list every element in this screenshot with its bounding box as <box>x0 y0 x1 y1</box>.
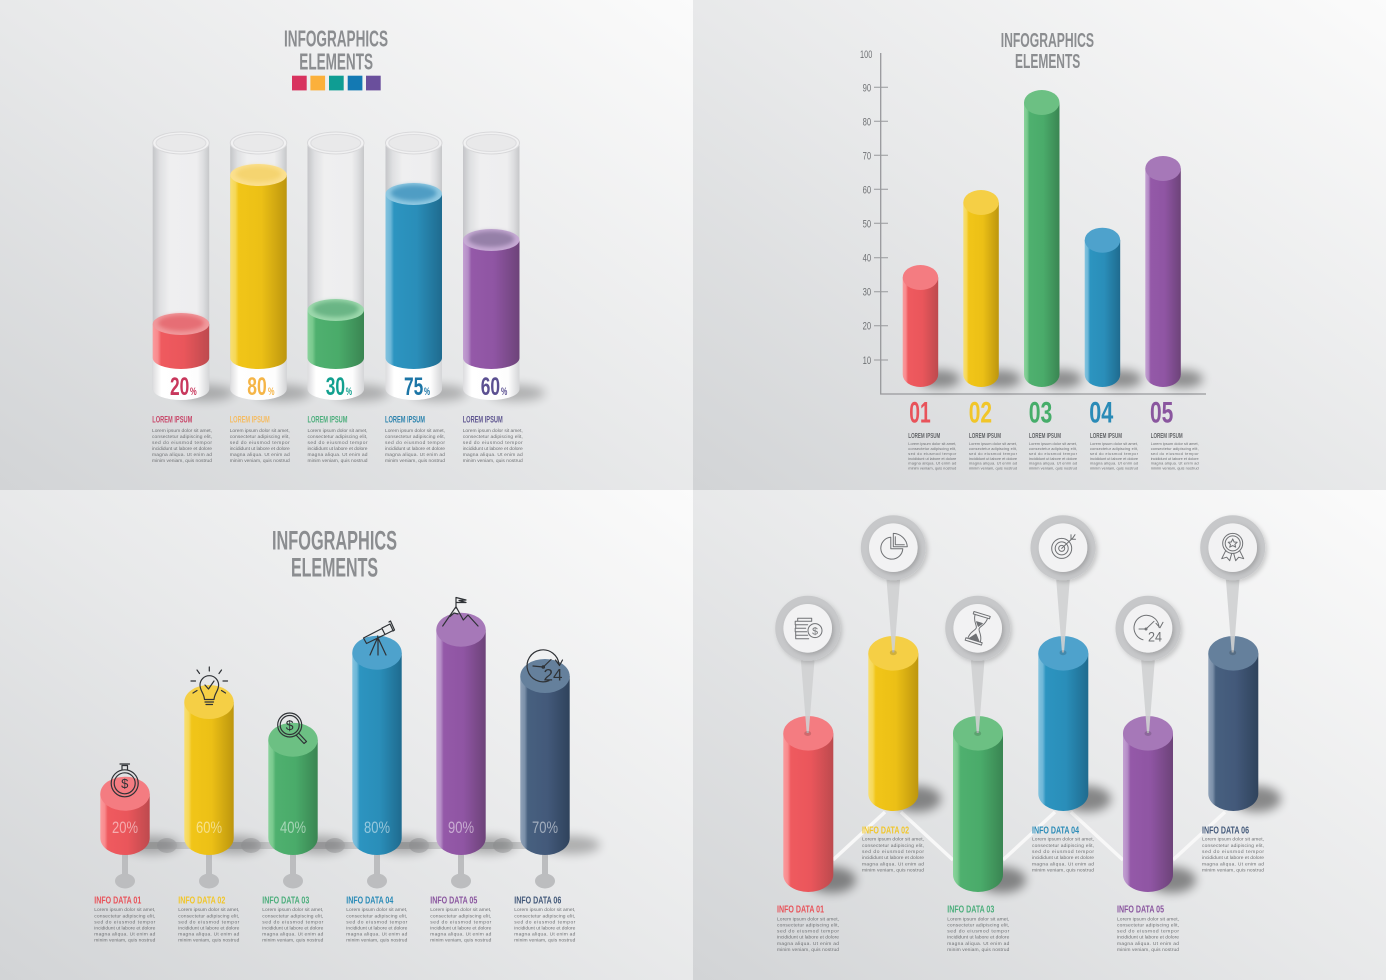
text block 03: magna aliqua. Ut enim ad <box>947 941 1010 947</box>
tube 3: 30 percent <box>308 132 389 401</box>
text block 02: consectetur adipiscing elit, <box>862 843 924 849</box>
text block 02: Lorem ipsum dolor sit amet, <box>862 837 924 843</box>
text block 2: magna aliqua. Ut enim ad <box>230 452 290 458</box>
value: 60%: 60 <box>481 373 500 401</box>
text block 05: Lorem ipsum dolor sit amet, <box>1151 441 1199 446</box>
text block 1: Lorem ipsum dolor sit amet, <box>152 428 212 434</box>
text block 03: incididunt ut labore et dolore <box>262 926 324 932</box>
text block 05: magna aliqua. Ut enim ad <box>1117 941 1179 947</box>
text block 3 <box>308 415 368 464</box>
text block 04: magna aliqua. Ut enim ad <box>1032 861 1094 867</box>
text block 02 <box>862 824 924 873</box>
text block 3: sed do eiusmod tempor <box>308 440 368 446</box>
text block 05: minim veniam, quis nostrud <box>1117 947 1179 953</box>
text block 01: Lorem ipsum dolor sit amet, <box>777 916 839 922</box>
color swatches <box>292 76 381 90</box>
cylinder 01: 20%: 20% <box>112 818 138 837</box>
text block 03: minim veniam, quis nostrud <box>1029 465 1077 470</box>
number labels: 05 <box>1150 397 1173 430</box>
text block 06: consectetur adipiscing elit, <box>514 913 575 919</box>
title: ELEMENTS <box>291 552 378 582</box>
text block 06 <box>514 895 576 944</box>
text block 04: magna aliqua. Ut enim ad <box>346 932 408 938</box>
text block 1: magna aliqua. Ut enim ad <box>152 452 212 458</box>
text block 4: Lorem ipsum dolor sit amet, <box>385 428 445 434</box>
tube 5: 60 percent <box>463 132 545 401</box>
cylinder 02 <box>963 190 1021 388</box>
value: 60%: % <box>501 386 507 398</box>
title <box>272 526 397 582</box>
axis with tick labels: 50 <box>863 218 871 230</box>
text block 02: minim veniam, quis nostrud <box>969 465 1017 470</box>
cylinder 03: 40% <box>268 723 348 855</box>
text block 04: magna aliqua. Ut enim ad <box>1090 461 1138 466</box>
text block 03: magna aliqua. Ut enim ad <box>1029 461 1077 466</box>
text block 5: minim veniam, quis nostrud <box>463 458 523 464</box>
axis with tick labels: 10 <box>863 355 871 367</box>
icon: magnifier with dollar <box>278 713 306 744</box>
text block 02: incididunt ut labore et dolore <box>969 456 1017 461</box>
text block 02 <box>178 895 240 944</box>
text block 04: consectetur adipiscing elit, <box>346 913 407 919</box>
text block 05 <box>1117 903 1179 953</box>
icon: clock 24: 24 <box>1148 630 1162 645</box>
cylinder 03 <box>1024 90 1082 388</box>
text block 2: sed do eiusmod tempor <box>230 440 290 446</box>
cylinder 04: 80%: 80% <box>364 818 390 837</box>
text block 03 <box>947 903 1010 953</box>
axis with tick labels: 30 <box>863 287 871 299</box>
text block 06: Lorem ipsum dolor sit amet, <box>1202 837 1264 843</box>
text block 02: Lorem ipsum dolor sit amet, <box>178 907 239 913</box>
text block 04: consectetur adipiscing elit, <box>1090 446 1138 451</box>
text block 03: magna aliqua. Ut enim ad <box>262 932 324 938</box>
text block 5: consectetur adipiscing elit, <box>463 434 523 440</box>
icon: stopwatch with dollar <box>111 764 138 797</box>
text block 04: incididunt ut labore et dolore <box>1032 855 1094 861</box>
text block 01: minim veniam, quis nostrud <box>908 465 956 470</box>
text block 5: Lorem ipsum dolor sit amet, <box>463 428 523 434</box>
tube 1: 20 percent <box>153 132 234 401</box>
text block 4: magna aliqua. Ut enim ad <box>385 452 445 458</box>
text block 04: minim veniam, quis nostrud <box>1090 465 1138 470</box>
text block 04: incididunt ut labore et dolore <box>1090 456 1138 461</box>
text block 03: sed do eiusmod tempor <box>1029 451 1078 456</box>
text block 1: LOREM IPSUM <box>152 415 192 425</box>
tube 2: 80 percent <box>230 132 311 401</box>
text block 04: minim veniam, quis nostrud <box>346 938 408 944</box>
text block 1: consectetur adipiscing elit, <box>152 434 212 440</box>
value: 20%: % <box>190 386 197 398</box>
text block 04: minim veniam, quis nostrud <box>1032 867 1094 873</box>
text block 05: consectetur adipiscing elit, <box>1117 922 1179 928</box>
text block 05: magna aliqua. Ut enim ad <box>1151 461 1199 466</box>
text block 06: sed do eiusmod tempor <box>1202 849 1264 855</box>
text block 1: sed do eiusmod tempor <box>152 440 212 446</box>
text block 01: incididunt ut labore et dolore <box>94 926 156 932</box>
text block 04: LOREM IPSUM <box>1090 431 1122 440</box>
title: ELEMENTS <box>299 48 373 74</box>
text block 02: magna aliqua. Ut enim ad <box>969 461 1017 466</box>
value: 75%: % <box>424 386 430 398</box>
text block 3: minim veniam, quis nostrud <box>308 458 368 464</box>
white zigzag connector <box>833 812 1225 860</box>
text block 2 <box>230 415 290 464</box>
text block 06: magna aliqua. Ut enim ad <box>514 932 576 938</box>
text block 01: minim veniam, quis nostrud <box>94 938 156 944</box>
cylinder 01: 20% <box>100 777 180 855</box>
text block 2: LOREM IPSUM <box>230 415 270 425</box>
text block 04: sed do eiusmod tempor <box>1032 849 1094 855</box>
text block 02: INFO DATA 02 <box>178 895 225 907</box>
text block 5: magna aliqua. Ut enim ad <box>463 452 523 458</box>
text block 01 <box>777 903 839 953</box>
cylinder 04 with pin <box>1030 515 1111 812</box>
title: ELEMENTS <box>1015 50 1080 73</box>
text block 04: INFO DATA 04 <box>1032 824 1079 836</box>
text block 3: consectetur adipiscing elit, <box>308 434 368 440</box>
text block 06: sed do eiusmod tempor <box>514 920 576 926</box>
text block 2: Lorem ipsum dolor sit amet, <box>230 428 290 434</box>
axis with tick labels <box>860 49 1206 394</box>
value: 20%: 20 <box>170 373 189 401</box>
text block 04: consectetur adipiscing elit, <box>1032 843 1094 849</box>
text block 01: magna aliqua. Ut enim ad <box>908 461 956 466</box>
text block 05: sed do eiusmod tempor <box>1117 928 1179 934</box>
text block 03: consectetur adipiscing elit, <box>947 922 1009 928</box>
text block 05: LOREM IPSUM <box>1151 431 1183 440</box>
text block 01: incididunt ut labore et dolore <box>777 935 839 941</box>
text block 03: Lorem ipsum dolor sit amet, <box>1029 441 1077 446</box>
cylinder 04 <box>1085 228 1142 388</box>
text block 01: consectetur adipiscing elit, <box>908 446 956 451</box>
text block 01: consectetur adipiscing elit, <box>777 922 839 928</box>
text block 02: minim veniam, quis nostrud <box>862 867 924 873</box>
text block 05: minim veniam, quis nostrud <box>1151 465 1199 470</box>
cylinder 05 with pin <box>1116 596 1196 893</box>
icon: light bulb with check <box>191 667 228 704</box>
text block 05: incididunt ut labore et dolore <box>1151 456 1199 461</box>
text block 01: INFO DATA 01 <box>94 895 141 907</box>
text block 5: sed do eiusmod tempor <box>463 440 523 446</box>
text block 02: LOREM IPSUM <box>969 431 1001 440</box>
text block 03: Lorem ipsum dolor sit amet, <box>947 916 1009 922</box>
text block 05: sed do eiusmod tempor <box>1151 451 1199 456</box>
axis with tick labels: 40 <box>863 253 871 265</box>
text block 4: sed do eiusmod tempor <box>385 440 445 446</box>
icon: clock 24: 24 <box>544 666 562 685</box>
text block 06: minim veniam, quis nostrud <box>1202 867 1264 873</box>
text block 3: LOREM IPSUM <box>308 415 348 425</box>
text block 3: incididunt ut labore et dolore <box>308 446 368 452</box>
text block 05: consectetur adipiscing elit, <box>1151 446 1199 451</box>
icon: mountain with flag <box>443 598 478 626</box>
text block 1 <box>152 415 212 464</box>
text block 05: INFO DATA 05 <box>430 895 477 907</box>
cylinder 06: 70% <box>520 659 600 855</box>
text block 02: sed do eiusmod tempor <box>178 920 240 926</box>
text block 06: INFO DATA 06 <box>514 895 561 907</box>
text block 01: magna aliqua. Ut enim ad <box>777 941 839 947</box>
text block 4: incididunt ut labore et dolore <box>385 446 445 452</box>
panel: staggered cylinders with pin icons <box>693 490 1386 980</box>
text block 01: sed do eiusmod tempor <box>94 920 156 926</box>
icon: clock 24 <box>527 650 562 685</box>
text block 05: incididunt ut labore et dolore <box>1117 935 1179 941</box>
text block 04: sed do eiusmod tempor <box>1090 451 1139 456</box>
title <box>284 26 388 74</box>
text block 3: magna aliqua. Ut enim ad <box>308 452 368 458</box>
cylinder 05: 90% <box>436 613 516 855</box>
text block 01: incididunt ut labore et dolore <box>908 456 956 461</box>
panel: axis cylinder chart <box>693 0 1386 490</box>
cylinder 06: 70%: 70% <box>532 818 558 837</box>
text block 02: sed do eiusmod tempor <box>862 849 924 855</box>
text block 01: sed do eiusmod tempor <box>777 928 839 934</box>
axis with tick labels: 100 <box>860 49 872 61</box>
text block 05 <box>1151 431 1199 470</box>
text block 4: LOREM IPSUM <box>385 415 425 425</box>
text block 01: minim veniam, quis nostrud <box>777 947 839 953</box>
text block 3: Lorem ipsum dolor sit amet, <box>308 428 368 434</box>
text block 02: magna aliqua. Ut enim ad <box>178 932 240 938</box>
text block 02: magna aliqua. Ut enim ad <box>862 861 924 867</box>
icon: coins <box>795 618 822 639</box>
text block 02: sed do eiusmod tempor <box>969 451 1018 456</box>
number labels: 01 <box>909 397 931 430</box>
text block 02: incididunt ut labore et dolore <box>862 855 924 861</box>
text block 01: Lorem ipsum dolor sit amet, <box>94 907 155 913</box>
value: 75%: 75 <box>404 373 423 401</box>
tube 4: 75 percent <box>386 132 467 401</box>
panel: glass tube percent chart <box>0 0 693 490</box>
text block 05: sed do eiusmod tempor <box>430 920 492 926</box>
text block 02: consectetur adipiscing elit, <box>969 446 1017 451</box>
text block 4: minim veniam, quis nostrud <box>385 458 445 464</box>
text block 04: Lorem ipsum dolor sit amet, <box>346 907 407 913</box>
text block 03: incididunt ut labore et dolore <box>1029 456 1077 461</box>
icon: coins: $ <box>812 625 818 637</box>
text block 04: sed do eiusmod tempor <box>346 920 408 926</box>
text block 05: magna aliqua. Ut enim ad <box>430 932 492 938</box>
text block 03: Lorem ipsum dolor sit amet, <box>262 907 323 913</box>
cylinder 02: 60%: 60% <box>196 818 222 837</box>
text block 03: minim veniam, quis nostrud <box>262 938 324 944</box>
text block 06: incididunt ut labore et dolore <box>514 926 576 932</box>
text block 05: minim veniam, quis nostrud <box>430 938 492 944</box>
icon: clock 24 <box>1134 615 1163 645</box>
text block 06: INFO DATA 06 <box>1202 824 1249 836</box>
text block 04: INFO DATA 04 <box>346 895 393 907</box>
title: INFOGRAPHICS <box>284 26 388 52</box>
text block 1: incididunt ut labore et dolore <box>152 446 212 452</box>
cylinder 05: 90%: 90% <box>448 818 474 837</box>
text block 03: INFO DATA 03 <box>262 895 309 907</box>
text block 01: consectetur adipiscing elit, <box>94 913 155 919</box>
icon: stopwatch with dollar: $ <box>121 776 129 791</box>
text block 5: LOREM IPSUM <box>463 415 503 425</box>
title: INFOGRAPHICS <box>272 526 397 556</box>
text block 01 <box>94 895 156 944</box>
number labels: 02 <box>969 397 992 430</box>
value: 30%: 30 <box>326 373 345 401</box>
text block 05 <box>430 895 492 944</box>
text block 2: incididunt ut labore et dolore <box>230 446 290 452</box>
icon: telescope <box>364 621 394 655</box>
text block 03 <box>1029 431 1078 470</box>
cylinder 06 with pin <box>1200 515 1281 812</box>
text block 01 <box>908 431 957 470</box>
text block 01: magna aliqua. Ut enim ad <box>94 932 156 938</box>
text block 03: LOREM IPSUM <box>1029 431 1061 440</box>
text block 04 <box>346 895 408 944</box>
text block 03 <box>262 895 324 944</box>
cylinder 02 with pin <box>861 515 941 812</box>
number labels: 04 <box>1089 397 1114 430</box>
text block 03: consectetur adipiscing elit, <box>262 913 323 919</box>
text block 02: minim veniam, quis nostrud <box>178 938 240 944</box>
text block 1: minim veniam, quis nostrud <box>152 458 212 464</box>
number labels: 03 <box>1029 397 1052 430</box>
text block 03: sed do eiusmod tempor <box>262 920 324 926</box>
text block 03: minim veniam, quis nostrud <box>947 947 1010 953</box>
text block 01: INFO DATA 01 <box>777 903 824 915</box>
text block 2: minim veniam, quis nostrud <box>230 458 290 464</box>
text block 06: Lorem ipsum dolor sit amet, <box>514 907 575 913</box>
text block 05: Lorem ipsum dolor sit amet, <box>1117 916 1179 922</box>
text block 2: consectetur adipiscing elit, <box>230 434 290 440</box>
text block 05: incididunt ut labore et dolore <box>430 926 492 932</box>
connector with stems and dots <box>115 838 555 888</box>
text block 06: incididunt ut labore et dolore <box>1202 855 1264 861</box>
cylinder 05 <box>1145 156 1203 388</box>
axis with tick labels: 60 <box>863 184 871 196</box>
text block 04: Lorem ipsum dolor sit amet, <box>1090 441 1138 446</box>
text block 06 <box>1202 824 1264 873</box>
text block 01: sed do eiusmod tempor <box>908 451 957 456</box>
axis with tick labels: 80 <box>863 116 871 128</box>
text block 04: Lorem ipsum dolor sit amet, <box>1032 837 1094 843</box>
cylinder 02: 60% <box>184 685 264 855</box>
text block 01: LOREM IPSUM <box>908 431 940 440</box>
text block 02: consectetur adipiscing elit, <box>178 913 239 919</box>
text block 06: consectetur adipiscing elit, <box>1202 843 1264 849</box>
icon: pie chart <box>881 533 907 559</box>
icon: hourglass <box>965 611 990 645</box>
text block 01: Lorem ipsum dolor sit amet, <box>908 441 956 446</box>
text block 03: INFO DATA 03 <box>947 903 994 915</box>
cylinder 03: 40%: 40% <box>280 818 306 837</box>
value: 30%: % <box>346 386 352 398</box>
icon: target <box>1052 535 1076 558</box>
title <box>1001 29 1094 73</box>
text block 06: minim veniam, quis nostrud <box>514 938 576 944</box>
text block 04 <box>1090 431 1139 470</box>
icon: award badge <box>1222 533 1244 561</box>
text block 03: consectetur adipiscing elit, <box>1029 446 1077 451</box>
text block 05: INFO DATA 05 <box>1117 903 1164 915</box>
cylinder 03 with pin <box>945 596 1026 893</box>
axis with tick labels: 70 <box>863 150 871 162</box>
text block 06: magna aliqua. Ut enim ad <box>1202 861 1264 867</box>
text block 5: incididunt ut labore et dolore <box>463 446 523 452</box>
text block 4 <box>385 415 445 464</box>
value: 80%: 80 <box>247 373 267 401</box>
cylinder 04: 80% <box>352 636 432 855</box>
text block 05: consectetur adipiscing elit, <box>430 913 491 919</box>
text block 02: Lorem ipsum dolor sit amet, <box>969 441 1017 446</box>
text block 03: incididunt ut labore et dolore <box>947 935 1010 941</box>
panel: cylinders with line icons <box>0 490 693 980</box>
text block 04 <box>1032 824 1094 873</box>
value: 80%: % <box>268 386 275 398</box>
number labels <box>909 397 1173 430</box>
axis with tick labels: 90 <box>863 82 871 94</box>
text block 5 <box>463 415 523 464</box>
text block 02: incididunt ut labore et dolore <box>178 926 240 932</box>
icon: magnifier with dollar: $ <box>286 717 294 733</box>
cylinder 01 with pin <box>775 596 856 893</box>
text block 04: incididunt ut labore et dolore <box>346 926 408 932</box>
title: INFOGRAPHICS <box>1001 29 1094 52</box>
axis with tick labels: 20 <box>863 321 871 333</box>
text block 4: consectetur adipiscing elit, <box>385 434 445 440</box>
text block 03: sed do eiusmod tempor <box>947 928 1010 934</box>
cylinder 01 <box>903 265 960 388</box>
text block 05: Lorem ipsum dolor sit amet, <box>430 907 491 913</box>
text block 02 <box>969 431 1018 470</box>
text block 02: INFO DATA 02 <box>862 824 909 836</box>
